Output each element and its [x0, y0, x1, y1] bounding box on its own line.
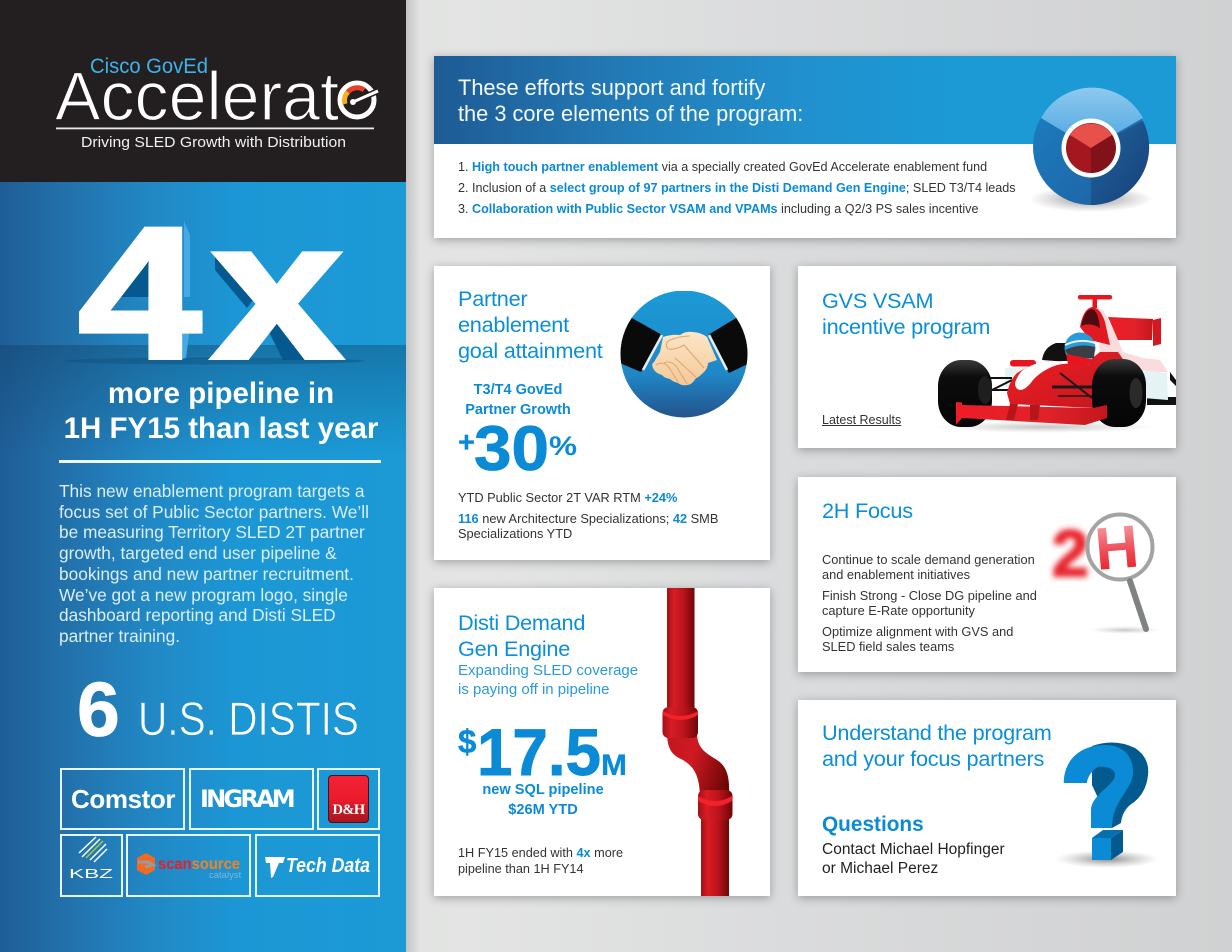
numbered list: 1. High touch partner enablement via a specially created GovEd Accelerate enablement fund [458, 160, 987, 174]
panel heading: Partner [458, 286, 527, 311]
numbered list: 3. Collaboration with Public Sector VSAM and VPAMs including a Q2/3 PS sales incentive [458, 202, 978, 216]
focus item three: SLED field sales teams [822, 639, 954, 654]
panel heading: 2H Focus [822, 498, 913, 523]
body notes: YTD Public Sector 2T VAR RTM +24% [458, 490, 677, 505]
logo: ScanSource: catalyst [209, 870, 242, 881]
panel heading [822, 720, 1052, 771]
contact: or Michael Perez [822, 860, 938, 877]
panel: partner enablement [434, 266, 770, 560]
pipeline headline [64, 377, 378, 445]
program description: bookings and new partner recruitment. [59, 564, 354, 584]
program description [59, 481, 369, 646]
logo: ScanSource [126, 834, 251, 897]
icon: race car [938, 295, 1176, 432]
4x white face [78, 180, 343, 401]
big 4x figure [66, 182, 364, 382]
focus list: Continue to scale demand generation [822, 552, 1035, 567]
panel heading: These efforts support and fortify [458, 75, 765, 100]
panel header band [434, 56, 1176, 144]
focus item three [822, 624, 1013, 654]
panel heading: Gen Engine [458, 636, 570, 661]
icon: magnifier 2H: H [1092, 512, 1141, 583]
6 US distis [77, 670, 359, 746]
program description: We’ve got a new program logo, single [59, 585, 348, 605]
panel: 2H focus [798, 477, 1176, 672]
logo: KBZ [60, 834, 123, 897]
panel: core elements [434, 56, 1176, 238]
panel heading: GVS VSAM [822, 288, 933, 313]
panel: GVS VSAM incentive [798, 266, 1176, 448]
focus item two [822, 588, 1037, 618]
program description: growth, targeted end user pipeline & [59, 543, 337, 563]
growth stat label: Partner Growth [465, 402, 571, 418]
$17.5M stat: $ [458, 723, 476, 760]
focus list [822, 552, 1035, 582]
$17.5M stat: M [601, 749, 627, 782]
focus list: and enablement initiatives [822, 567, 970, 582]
questions heading: Questions [822, 813, 924, 836]
panel: understand the program [798, 700, 1176, 896]
logo: ScanSource: scansource [158, 856, 240, 873]
logo header [0, 0, 406, 182]
growth stat label: T3/T4 GovEd [474, 382, 562, 398]
specializations note: 116 new Architecture Specializations; 42 SMB [458, 511, 718, 526]
pipeline stat labels: new SQL pipeline [482, 782, 604, 798]
+30% stat: + [458, 427, 475, 459]
logo header: Cisco GovEd [90, 55, 208, 78]
logo: KBZ: KBZ [69, 866, 113, 881]
numbered list: 2. Inclusion of a select group of 97 partners in the Disti Demand Gen Engine; SLED T3/T4 leads [458, 181, 1016, 195]
1H note: pipeline than 1H FY14 [458, 862, 584, 876]
program description: focus set of Public Sector partners. We’ll [59, 502, 369, 522]
program description: This new enablement program targets a [59, 481, 364, 501]
logo: D&H [317, 768, 380, 830]
panel heading [458, 286, 603, 363]
left sidebar [0, 0, 406, 952]
+30% stat [458, 416, 577, 481]
icon: magnifier 2H [1048, 512, 1154, 633]
blue gradient background [0, 182, 406, 952]
floor band [0, 345, 406, 455]
panel heading: the 3 core elements of the program: [458, 101, 803, 126]
program description: dashboard reporting and Disti SLED [59, 605, 336, 625]
pipeline stat labels: $26M YTD [508, 802, 578, 818]
logo header: Driving SLED Growth with Distribution [81, 134, 346, 151]
panel heading: and your focus partners [822, 746, 1044, 771]
logo: D&H: D&H [332, 802, 365, 818]
specializations note: Specializations YTD [458, 526, 572, 541]
growth stat label [465, 382, 571, 418]
logo: Tech Data: Tech Data [286, 855, 370, 877]
icon: handshake [620, 291, 748, 418]
panel: disti demand gen engine [434, 588, 770, 896]
+30% stat: % [549, 431, 577, 461]
panel heading: goal attainment [458, 338, 603, 363]
1H note: 1H FY15 ended with 4x more [458, 846, 623, 860]
link: latest results: Latest Results [822, 413, 901, 427]
logo: Ingram Micro: INGRAM [200, 785, 293, 813]
focus item three: Optimize alignment with GVS and [822, 624, 1013, 639]
panel heading [822, 288, 990, 339]
logo: Ingram Micro [189, 768, 314, 830]
panel heading: Disti Demand [458, 610, 585, 635]
panel heading: enablement [458, 312, 569, 337]
specializations note [458, 511, 718, 541]
icon: magnifier 2H: 2 [1052, 516, 1089, 590]
contact [822, 841, 1005, 877]
icon: red pipe [662, 588, 732, 896]
program description: partner training. [59, 626, 180, 646]
panel heading [458, 610, 585, 661]
logo header: Accelerat [55, 58, 339, 135]
divider [59, 460, 381, 463]
pipeline stat labels [482, 782, 604, 818]
pipeline headline: 1H FY15 than last year [64, 412, 378, 445]
panel heading: Understand the program [822, 720, 1052, 745]
subheading: is paying off in pipeline [458, 681, 610, 698]
subheading: Expanding SLED coverage [458, 662, 638, 679]
pipeline headline: more pipeline in [108, 377, 334, 410]
panel heading: incentive program [822, 314, 990, 339]
focus item two: Finish Strong - Close DG pipeline and [822, 588, 1037, 603]
logo: Comstor [60, 768, 185, 830]
icon: question mark [1060, 742, 1154, 867]
contact: Contact Michael Hopfinger [822, 841, 1005, 858]
logo: Comstor: Comstor [71, 784, 175, 814]
focus item two: capture E-Rate opportunity [822, 603, 975, 618]
numbered list [458, 160, 1016, 216]
1H note [458, 846, 623, 876]
icon: three-segment target [1033, 88, 1150, 211]
panel heading [458, 75, 803, 126]
program description: be measuring Territory SLED 2T partner [59, 522, 365, 542]
subheading [458, 662, 638, 698]
logo: Tech Data [255, 834, 380, 897]
